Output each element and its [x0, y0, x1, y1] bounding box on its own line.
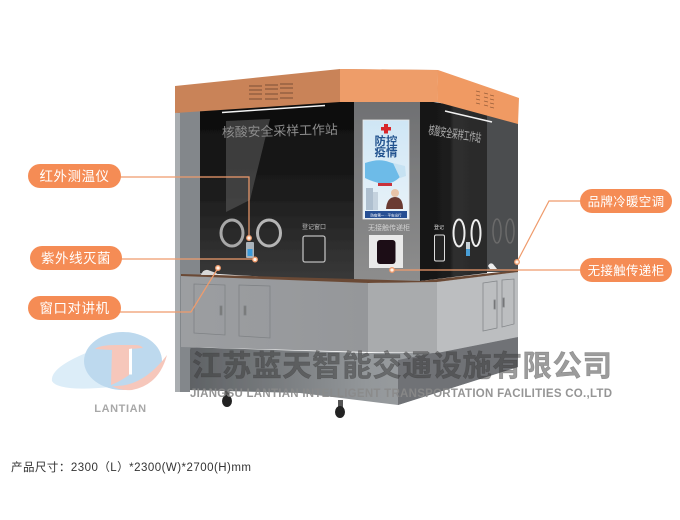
- callout: infrared thermometer: [28, 164, 121, 188]
- counter panel: [181, 272, 518, 353]
- registration window: [303, 236, 325, 262]
- logo wordmark: LANTIAN: [94, 403, 147, 415]
- logo disc: [84, 332, 162, 390]
- poster: 防疫第一 · 平安出行: [370, 212, 402, 218]
- line: air conditioner: [517, 201, 580, 262]
- line: contactless cabinet: [392, 269, 580, 271]
- cabinet doors right: [483, 279, 514, 331]
- right device: [466, 242, 470, 256]
- poster: 疫情: [374, 145, 398, 159]
- callout: air conditioner: [580, 189, 672, 213]
- intercoms: [201, 263, 497, 275]
- central column: [354, 100, 420, 281]
- callout: UV sterilizer: [30, 246, 122, 270]
- transfer cabinet label: 无接触传递柜: [368, 223, 410, 232]
- callout: infrared thermometer: 红外测温仪: [40, 169, 110, 184]
- counter middle section: [368, 282, 437, 353]
- company logo: [52, 332, 167, 415]
- watermark english name: JIANGSU LANTIAN INTELLIGENT TRANSPORTATION FACILITIES CO.,LTD: [190, 388, 612, 400]
- reflection: [226, 119, 270, 212]
- leader lines: [120, 177, 580, 312]
- counter right section: [437, 272, 518, 353]
- callout: air conditioner: 品牌冷暖空调: [588, 194, 664, 209]
- logo swoosh: [52, 353, 112, 389]
- right rings: [454, 220, 464, 246]
- leader dots: [216, 236, 519, 272]
- callout: contactless cabinet: [580, 258, 672, 282]
- right registration window: [434, 235, 444, 261]
- right window: [420, 100, 514, 281]
- line: infrared thermometer: [120, 177, 249, 238]
- callout: contactless cabinet: 无接触传递柜: [588, 263, 664, 278]
- callout: window intercom: 窗口对讲机: [40, 300, 110, 316]
- window title: 核酸安全采样工作站: [222, 122, 338, 140]
- cabinet doors left: [194, 284, 270, 338]
- roof: [175, 69, 519, 124]
- right label: 登记: [434, 224, 444, 231]
- casters: [222, 388, 345, 418]
- callout: window intercom: [28, 296, 121, 320]
- logo T: [95, 345, 143, 385]
- counter top edge: [181, 270, 518, 283]
- product dimensions: 产品尺寸：2300（L）*2300(W)*2700(H)mm: [11, 460, 251, 474]
- right pillar: [487, 112, 518, 272]
- left window: [200, 100, 354, 282]
- callout: UV sterilizer: 紫外线灭菌: [41, 251, 111, 266]
- left pillar: [175, 108, 205, 392]
- poster: [363, 120, 409, 219]
- right window title: 核酸安全采样工作站: [428, 122, 482, 145]
- thermometer device: [246, 242, 254, 258]
- poster: 防控: [374, 134, 398, 148]
- light strips: [222, 106, 492, 122]
- transfer cabinet: [369, 235, 403, 268]
- kiosk workstation: [175, 69, 519, 418]
- rings: [221, 220, 243, 246]
- line: window intercom: [120, 268, 218, 312]
- watermark company name: 江苏蓝天智能交通设施有限公司: [192, 350, 612, 383]
- line: UV sterilizer: [121, 258, 255, 260]
- roof vents: [249, 84, 293, 99]
- registration label: 登记窗口: [302, 223, 326, 231]
- base pedestal: [181, 336, 518, 405]
